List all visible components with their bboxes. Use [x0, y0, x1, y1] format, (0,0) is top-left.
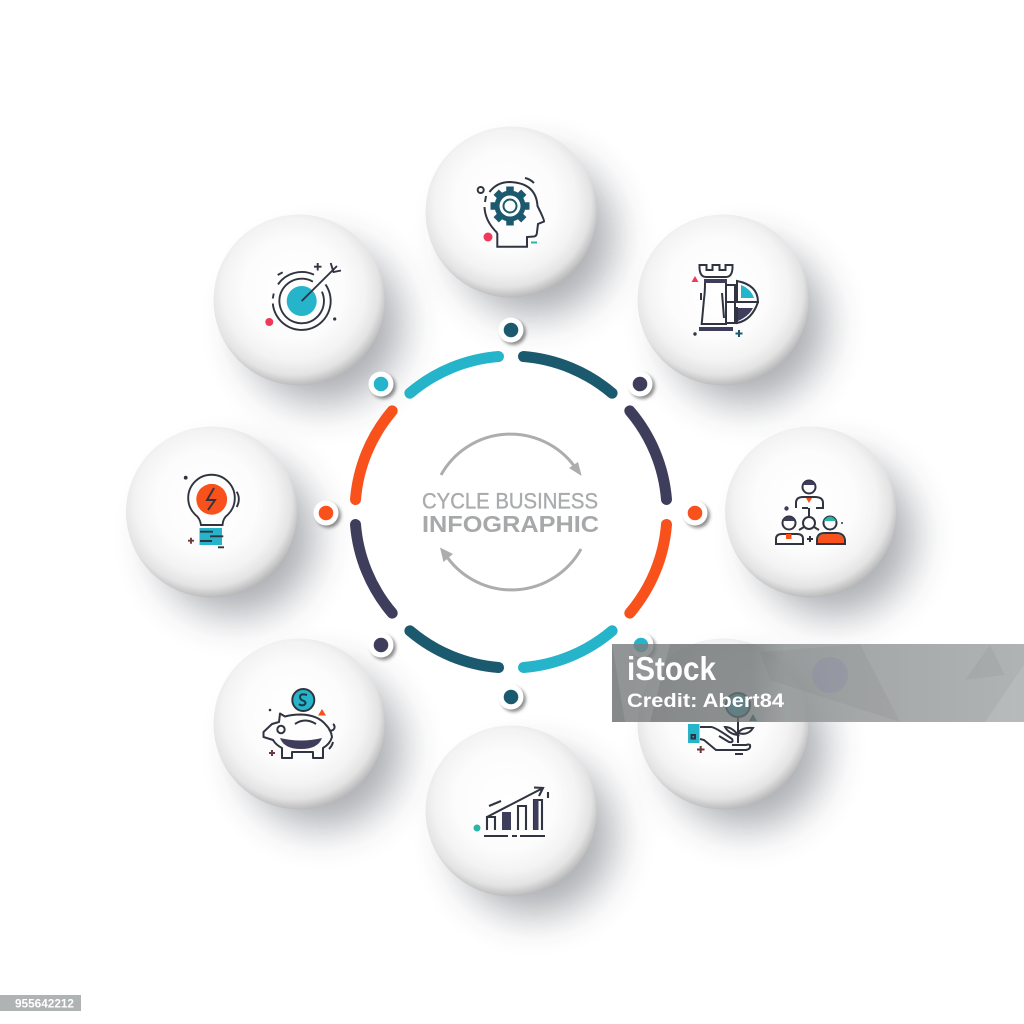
node dots [314, 318, 710, 712]
arrow: lower cycle [440, 548, 581, 590]
image id: 955642212 [15, 996, 74, 1010]
sphere: left [126, 426, 297, 598]
sphere: bottom right [638, 638, 808, 810]
icon: head with gear [478, 178, 544, 247]
sphere: right [725, 426, 896, 598]
watermark credit: Credit: Abert84 [627, 691, 784, 712]
sphere: bottom [426, 726, 596, 896]
icon: rook and pie chart [692, 265, 758, 337]
segmented ring [330, 331, 692, 693]
icon: target [265, 263, 341, 330]
icon: piggy bank [264, 689, 335, 758]
sphere: top [426, 126, 596, 298]
icon: light bulb [184, 475, 239, 547]
arrow: upper cycle [441, 434, 582, 476]
sphere: top right [638, 214, 808, 386]
title line 2: INFOGRAPHIC [422, 511, 599, 537]
watermark banner [612, 644, 1024, 722]
title line 1: CYCLE BUSINESS [422, 488, 598, 513]
icon: team hierarchy [776, 480, 845, 544]
icon: growth chart [474, 788, 548, 836]
image id tag [0, 995, 81, 1011]
icon: hand with plant [688, 693, 757, 754]
sphere: bottom left [214, 638, 384, 810]
sphere shadows [155, 156, 914, 915]
sphere: top left [214, 214, 384, 386]
watermark brand: iStock [627, 650, 717, 687]
